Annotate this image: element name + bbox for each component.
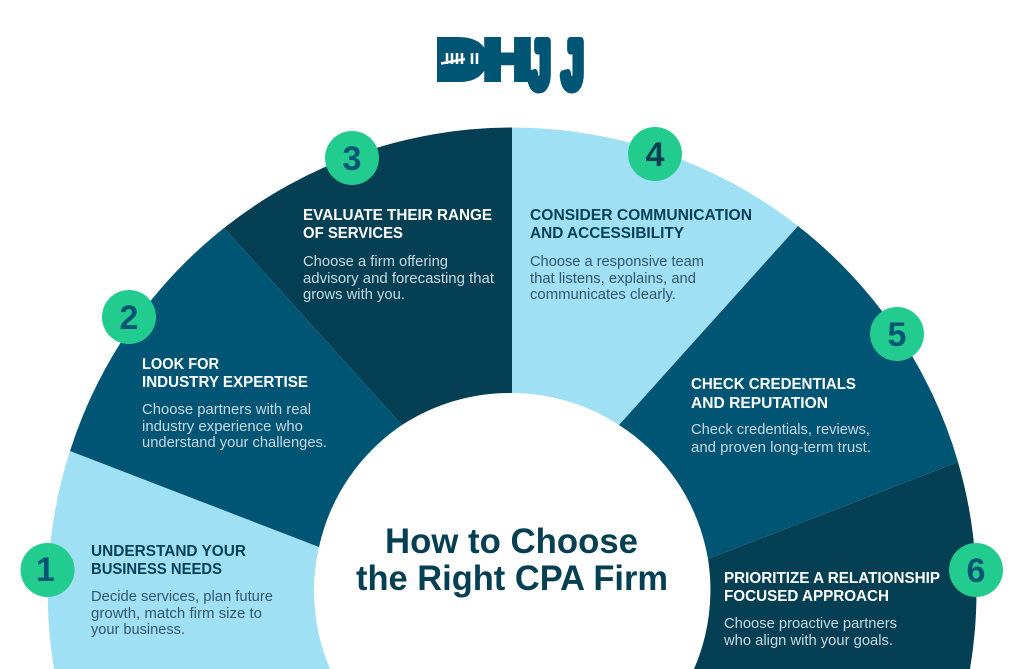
body 6 [723, 616, 897, 649]
body 5: Check credentials, reviews, [691, 422, 870, 438]
heading 5: AND REPUTATION [691, 395, 828, 412]
body 2: Choose partners with real [142, 402, 311, 418]
logo: DHJJ [436, 28, 584, 103]
body 2 [142, 402, 327, 451]
body 4 [530, 254, 704, 303]
heading 5: CHECK CREDENTIALS [691, 376, 856, 393]
badge 4 [628, 127, 682, 181]
heading 2: LOOK FOR [142, 356, 219, 373]
logo: DHJJ: J [562, 28, 584, 103]
title: How to Choose [385, 522, 638, 561]
badge 4: 4 [646, 136, 665, 174]
wedge 2 [70, 228, 402, 547]
body 3 [303, 254, 494, 303]
panel: step 3 evaluate their range of services [224, 128, 512, 425]
badge 1 [20, 543, 74, 597]
body 1 [91, 589, 273, 638]
heading 3 [303, 207, 492, 242]
badge 2 [102, 290, 156, 344]
body 6: who align with your goals. [723, 633, 893, 649]
badge 3: 3 [343, 140, 361, 178]
badge 2: 2 [120, 299, 138, 337]
badge 3 [325, 131, 379, 185]
body 4: Choose a responsive team [530, 254, 704, 270]
wedge 5 [619, 226, 958, 559]
badge 5: 5 [888, 316, 906, 354]
heading 3: EVALUATE THEIR RANGE [303, 207, 492, 224]
panel: step 1 understand your business needs [20, 451, 330, 669]
heading 4 [530, 207, 752, 242]
title: the Right CPA Firm [356, 559, 668, 598]
heading 3: OF SERVICES [303, 225, 403, 242]
logo: DHJJ: D [436, 28, 487, 92]
wedge 4 [512, 128, 798, 425]
body 5: and proven long-term trust. [691, 440, 871, 456]
body 4: that listens, explains, and [530, 271, 696, 287]
badge 1: 1 [36, 551, 55, 589]
heading 6 [724, 570, 940, 605]
panel: step 6 prioritize a relationship focused approach [694, 462, 1003, 669]
body 1: your business. [91, 622, 185, 638]
wedge 3 [224, 128, 512, 425]
title [356, 522, 668, 598]
body 4: communicates clearly. [530, 287, 676, 303]
panel: step 4 consider communication and accessibility [512, 127, 798, 425]
heading 6: FOCUSED APPROACH [724, 588, 889, 605]
body 3: grows with you. [303, 287, 405, 303]
body 3: Choose a firm offering [303, 254, 448, 270]
heading 2 [142, 356, 308, 391]
badge 5 [870, 307, 924, 361]
body 5 [691, 422, 871, 456]
wedge 1 [48, 451, 330, 669]
panel: step 5 check credentials and reputation [619, 226, 958, 559]
logo: DHJJ: J [529, 28, 551, 103]
badge 6: 6 [967, 552, 985, 590]
body 6: Choose proactive partners [724, 616, 897, 632]
heading 4: AND ACCESSIBILITY [530, 225, 685, 242]
heading 1 [91, 543, 246, 578]
heading 4: CONSIDER COMMUNICATION [530, 207, 752, 224]
badge 6 [949, 543, 1003, 597]
wedge 6 [694, 462, 976, 669]
heading 1: BUSINESS NEEDS [91, 561, 222, 578]
body 1: growth, match firm size to [91, 606, 262, 622]
heading 1: UNDERSTAND YOUR [91, 543, 246, 560]
heading 2: INDUSTRY EXPERTISE [142, 374, 308, 391]
body 2: industry experience who [142, 419, 303, 435]
body 3: advisory and forecasting that [303, 271, 494, 287]
heading 5 [691, 376, 856, 412]
body 1: Decide services, plan future [91, 589, 273, 605]
body 2: understand your challenges. [142, 435, 327, 451]
logo: DHJJ: H [483, 28, 532, 92]
panel: step 2 look for industry expertise [70, 228, 402, 547]
heading 6: PRIORITIZE A RELATIONSHIP [724, 570, 940, 587]
